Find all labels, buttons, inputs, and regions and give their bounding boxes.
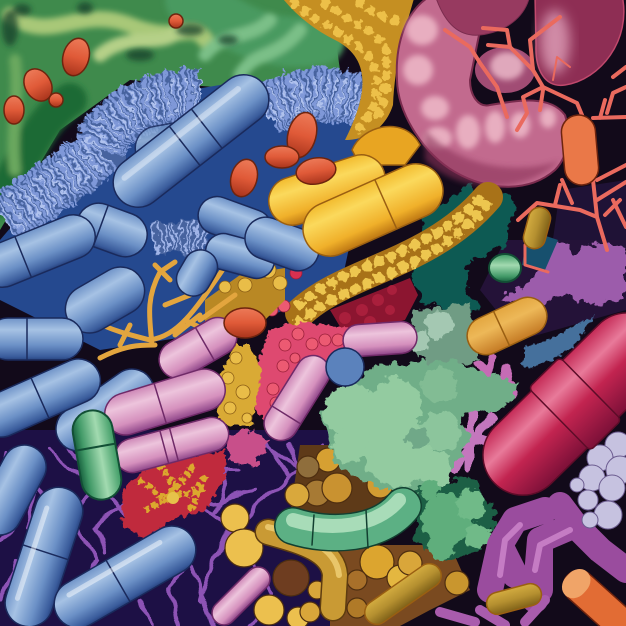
capsule: large red — [464, 293, 626, 515]
icon: pale lilac coral — [570, 432, 626, 529]
icon: blue coral left — [5, 94, 368, 240]
pink coral patch — [225, 428, 270, 465]
panel: light green lichen — [320, 305, 520, 490]
capsule: curved green — [293, 500, 403, 548]
icon: orange branching coral — [92, 255, 235, 358]
capsules: blue — [0, 65, 325, 626]
cluster: gold discs bottom — [221, 445, 470, 626]
capsule: green vertical — [69, 254, 521, 503]
panel: dark purple right coral — [445, 180, 626, 470]
capsules: yellow — [263, 126, 553, 626]
cluster: red and yellow beads lower — [122, 450, 225, 540]
gold bead strip top — [280, 0, 415, 140]
panel: blue background region — [0, 80, 370, 350]
panel: lower left purple coral — [0, 430, 340, 626]
icon: purple coral right bottom — [440, 505, 626, 625]
icon: blue ball — [326, 348, 364, 386]
cluster: gold beads centre — [205, 262, 287, 425]
panel: intestine — [397, 0, 624, 187]
icon: red blood vessels — [445, 17, 626, 272]
capsules: pink — [100, 311, 418, 626]
yellow bead strip — [300, 197, 488, 322]
panel: green coral top left — [0, 0, 340, 230]
icon: curved gold tube — [268, 527, 339, 608]
cluster: red berries — [248, 267, 418, 420]
panel: lower green lichen — [415, 475, 497, 562]
panel: teal coral — [412, 185, 515, 310]
